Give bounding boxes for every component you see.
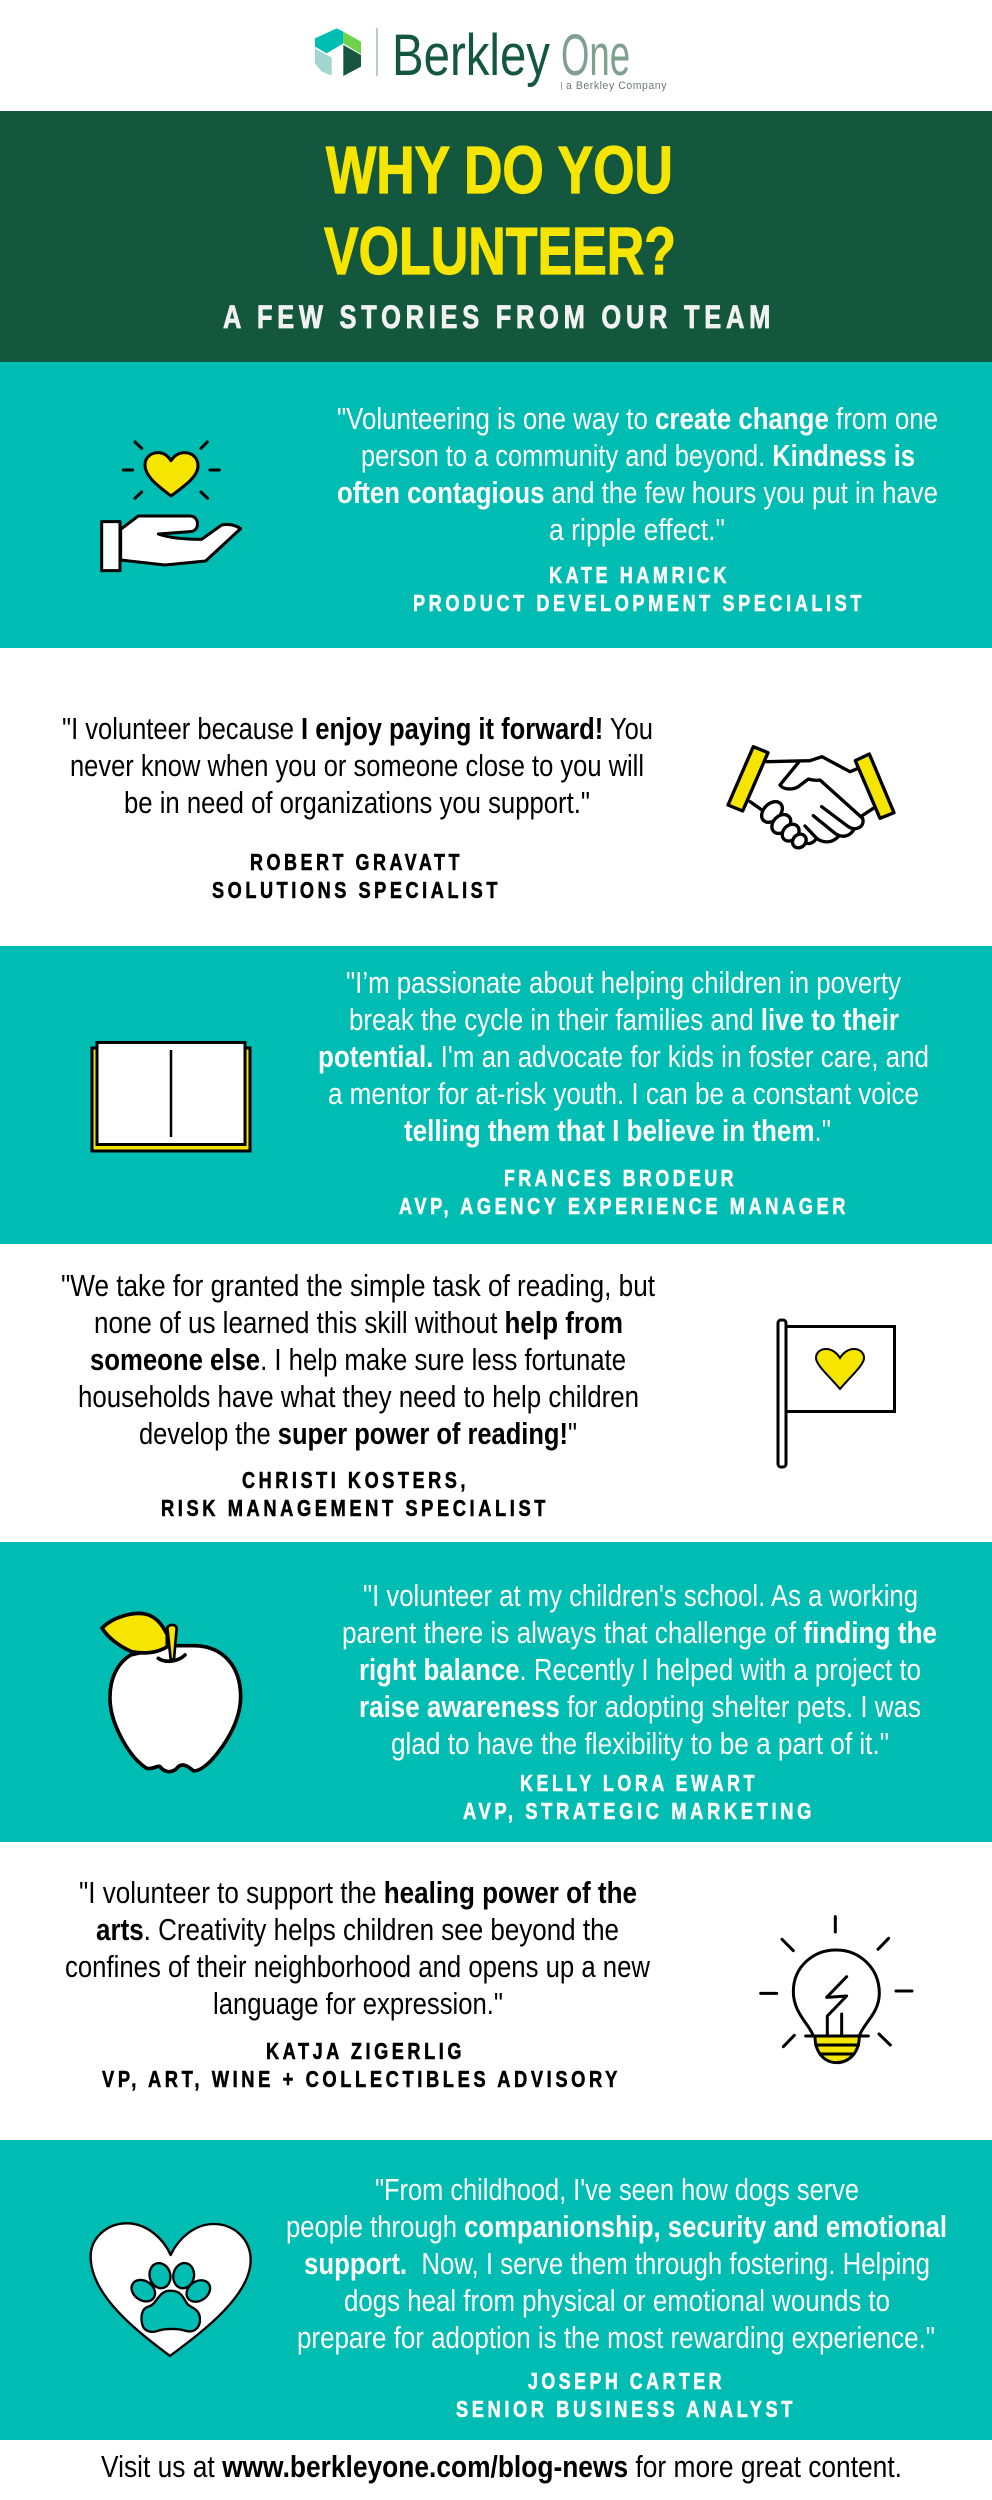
quote: "From childhood, I've seen how dogs serve [375,2173,859,2207]
quote: "We take for granted the simple task of reading, but [61,1269,655,1303]
panel: Kate Hamrick [0,362,992,648]
quote: households have what they need to help children [78,1380,639,1414]
title [324,133,676,289]
quote [62,712,653,820]
attribution [413,562,865,616]
logo mark [315,28,361,76]
attribution: AVP, AGENCY EXPERIENCE MANAGER [399,1193,849,1219]
logo: Berkley One [315,23,667,92]
attribution: KATE HAMRICK [549,562,730,588]
attribution [212,849,501,903]
panel: Frances Brodeur [0,946,992,1244]
icon: light bulb [761,1917,912,2063]
quote: break the cycle in their families and live to their [349,1003,899,1037]
attribution: KELLY LORA EWART [520,1770,758,1796]
panel: Christi Kosters [0,1244,992,1542]
quote [286,2173,947,2355]
logo: Berkley One: a Berkley Company [566,80,667,92]
quote: "I’m passionate about helping children in poverty [346,966,902,1000]
attribution [463,1770,815,1824]
quote: a ripple effect." [549,513,725,547]
attribution: SENIOR BUSINESS ANALYST [456,2396,796,2422]
quote: "Volunteering is one way to create change from one [337,402,938,436]
panel: Kelly Lora Ewart [0,1542,992,1842]
quote [337,402,938,547]
title: VOLUNTEER? [324,214,676,289]
attribution: SOLUTIONS SPECIALIST [212,877,501,903]
quote: parent there is always that challenge of finding the [342,1616,937,1650]
quote: "I volunteer to support the healing power of the [79,1876,637,1910]
logo: Berkley One: One [561,23,630,88]
subtitle: A FEW STORIES FROM OUR TEAM [223,299,775,335]
quote: confines of their neighborhood and opens up a new [65,1950,651,1984]
logo: Berkley One: Berkley [392,23,550,88]
quote [61,1269,655,1451]
icon: flag with heart [778,1320,894,1467]
quote: arts. Creativity helps children see beyond the [96,1913,619,1947]
quote [65,1876,651,2021]
attribution [161,1467,549,1521]
attribution: FRANCES BRODEUR [504,1165,737,1191]
quote [342,1579,937,1761]
quote: someone else. I help make sure less fortunate [90,1343,626,1377]
quote: glad to have the flexibility to be a part of it." [391,1727,889,1761]
title: WHY DO YOU [326,133,673,208]
panel: Joseph Carter [0,2140,992,2440]
panel: Katja Zigerlig [0,1842,992,2140]
header panel [0,111,992,362]
icon: handshake [728,747,894,851]
quote: never know when you or someone close to you will [70,749,644,783]
quote: raise awareness for adopting shelter pets. I was [359,1690,921,1724]
attribution: RISK MANAGEMENT SPECIALIST [161,1495,549,1521]
quote: dogs heal from physical or emotional wounds to [344,2284,890,2318]
attribution: ROBERT GRAVATT [250,849,463,875]
attribution [102,2038,621,2092]
icon: apple [102,1613,241,1772]
quote [318,966,929,1148]
attribution: AVP, STRATEGIC MARKETING [463,1798,815,1824]
quote: develop the super power of reading!" [139,1417,577,1451]
quote: often contagious and the few hours you put in have [337,476,938,510]
attribution: CHRISTI KOSTERS, [242,1467,469,1493]
attribution [399,1165,849,1219]
attribution: VP, ART, WINE + COLLECTIBLES ADVISORY [102,2066,621,2092]
quote: be in need of organizations you support." [124,786,590,820]
icon: open book [92,1042,250,1151]
attribution: PRODUCT DEVELOPMENT SPECIALIST [413,590,865,616]
panel: Robert Gravatt [0,648,992,946]
icon: hand holding heart [102,442,241,571]
attribution: JOSEPH CARTER [528,2368,725,2394]
quote: language for expression." [213,1987,503,2021]
quote: none of us learned this skill without help from [94,1306,623,1340]
quote: "I volunteer because I enjoy paying it forward! You [62,712,653,746]
attribution: KATJA ZIGERLIG [266,2038,465,2064]
quote: person to a community and beyond. Kindness is [361,439,915,473]
footer text: Visit us at www.berkleyone.com/blog-news for more great content. [101,2450,902,2484]
attribution [456,2368,796,2422]
quote: telling them that I believe in them." [404,1114,831,1148]
quote: right balance. Recently I helped with a project to [359,1653,921,1687]
icon: heart with paw [91,2223,251,2356]
